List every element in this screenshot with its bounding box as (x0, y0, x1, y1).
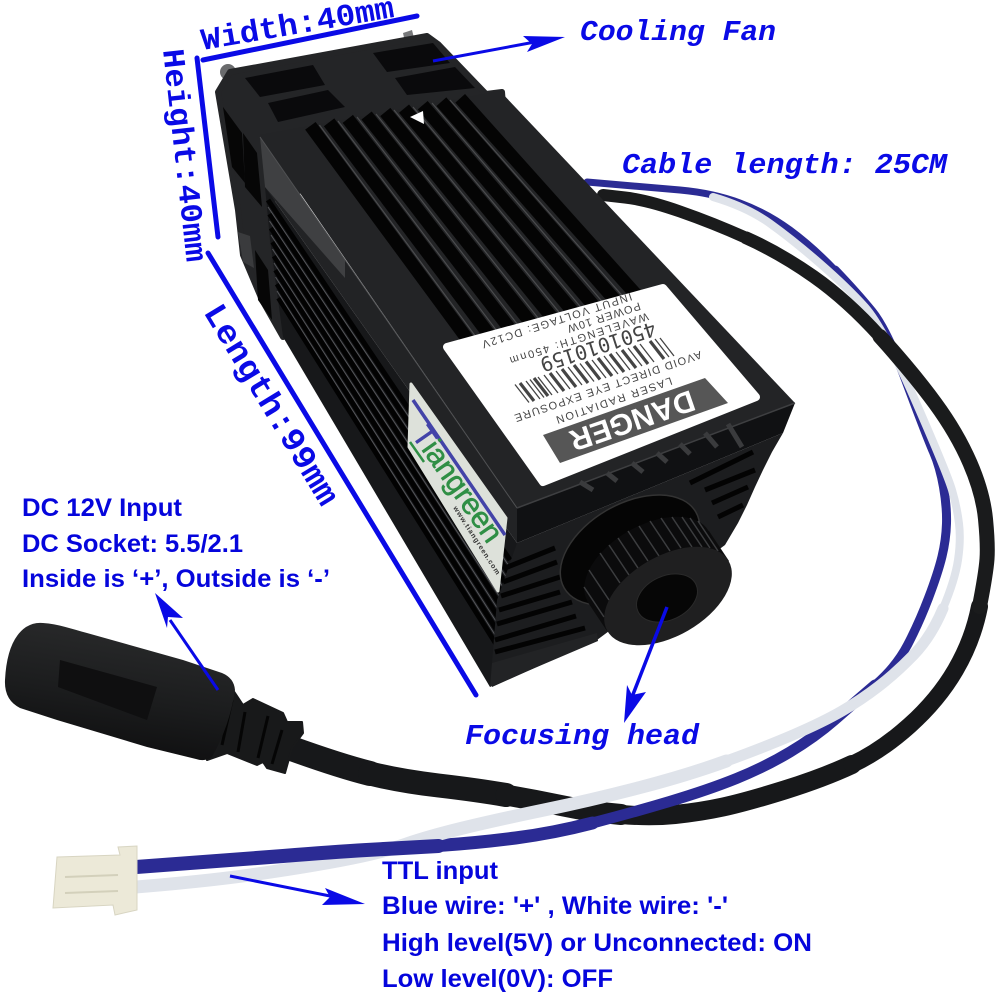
arrow: cooling fan (433, 36, 565, 61)
top fin channels (310, 98, 668, 385)
danger label sticker: WAVELENGTH: 450nm (508, 310, 650, 366)
danger band (543, 378, 728, 463)
barcode (515, 338, 674, 402)
focusing head (541, 472, 749, 666)
knurled ring (584, 517, 718, 617)
brand sticker (405, 384, 509, 591)
label: cable length: Cable length: 25CM (622, 149, 949, 182)
text block: TTL input (382, 857, 812, 993)
text block: DC input: Inside is ‘+’, Outside is ‘-’ (22, 565, 330, 593)
text block: TTL input: Blue wire: '+' , White wire: '-' (382, 892, 728, 920)
danger label sticker: DANGER (565, 383, 699, 457)
text block: DC input: DC Socket: 5.5/2.1 (22, 530, 243, 558)
text block: DC input (22, 494, 330, 593)
label: cooling fan: Cooling Fan (580, 16, 776, 49)
grip texture (58, 660, 157, 720)
brand sticker: www.tiangreen.com (451, 504, 501, 576)
DC barrel jack (5, 623, 303, 773)
arrow: TTL wires (230, 876, 365, 905)
heat sink top plate (260, 91, 795, 543)
danger label sticker: 4501010159 (537, 317, 659, 377)
plate front edge (517, 403, 795, 543)
arrow: DC input (155, 593, 218, 690)
blue wire, front run to connector (123, 846, 438, 868)
brand sticker: Tiangreen (405, 420, 509, 549)
strain relief (207, 690, 303, 773)
white signal wire (123, 197, 960, 888)
arrow: focusing head (624, 607, 667, 723)
label: height: Height:40mm (153, 47, 212, 264)
dimension line: length (208, 253, 476, 695)
text block: TTL input: Low level(0V): OFF (382, 965, 613, 993)
dimension line: height (197, 58, 218, 237)
danger label sticker (447, 288, 756, 482)
barrel body (5, 623, 235, 760)
danger label sticker: AVOID DIRECT EYE EXPOSURE (513, 348, 703, 424)
icon: fan screw (220, 64, 236, 80)
dimension line: width (203, 16, 417, 60)
label: focusing head: Focusing head (465, 720, 700, 753)
text block: DC input: DC 12V Input (22, 494, 183, 522)
JST wire connector (53, 846, 137, 915)
black power cable, lower run (290, 606, 980, 816)
lens aperture (629, 565, 705, 631)
heat sink side fins (265, 187, 517, 687)
cooling fan housing (218, 30, 505, 337)
black power cable, upper run (603, 195, 987, 606)
text block: TTL input: TTL input (382, 857, 499, 885)
label: length: Length:99mm (194, 298, 345, 513)
text block: TTL input: High level(5V) or Unconnected: ON (382, 929, 812, 957)
heat sink front fins (490, 433, 783, 687)
danger label sticker: POWER 10W (565, 299, 642, 334)
blue signal wire (438, 182, 947, 846)
plate side edge (260, 137, 517, 543)
danger label sticker: INPUT VOLTAGE: DC12V (480, 290, 633, 350)
danger label sticker: LASER RADIATION (554, 374, 674, 425)
